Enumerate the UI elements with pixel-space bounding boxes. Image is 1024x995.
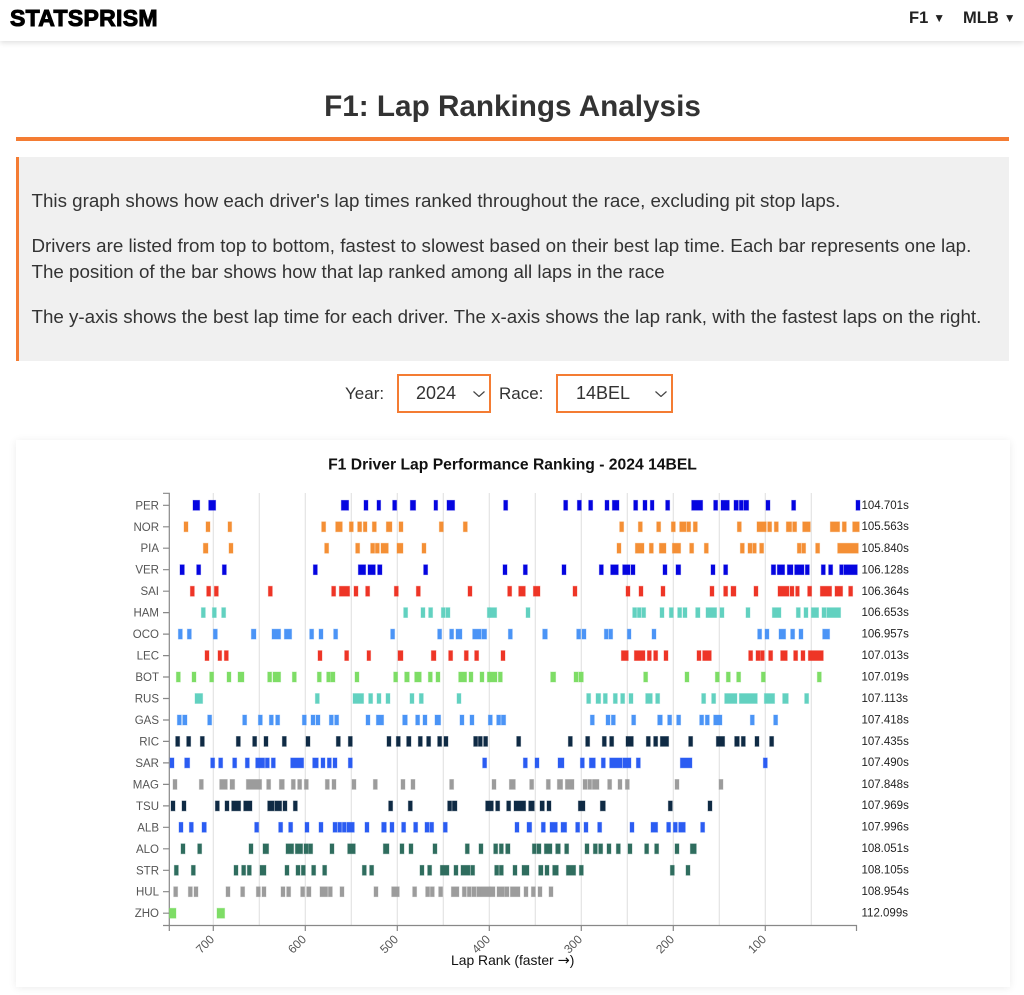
best lap time labels: 112.099s [862,907,908,919]
x tick labels: 100 [745,932,769,956]
driver labels [133,500,160,920]
panel: chart card [16,440,1010,987]
driver labels: BOT [135,672,159,684]
best lap time labels: 107.848s [862,779,909,791]
driver labels: RUS [135,694,159,706]
driver labels: ALO [136,844,159,856]
best lap time labels: 107.019s [862,672,909,684]
best lap time labels: 107.113s [862,693,908,705]
driver labels: PIA [140,543,159,555]
driver labels: NOR [133,522,159,534]
bars: GAS [177,715,778,725]
best lap time labels: 108.105s [862,864,909,876]
best lap time labels: 105.840s [862,543,909,555]
best lap time labels: 107.490s [862,757,909,769]
title: F1: Lap Rankings Analysis [324,90,701,123]
driver labels: OCO [133,629,159,641]
logo: STATSPRISM [10,5,158,31]
bars: STR [174,865,690,875]
bars: SAR [170,758,767,768]
driver labels: MAG [133,779,159,791]
x tick labels [193,932,769,956]
driver labels: LEC [137,651,159,663]
x tick labels: 700 [193,932,217,956]
text: how to read bars: The position of the bar shows how that lap ranked among all laps in the race [32,261,665,282]
text: graph summary: This graph shows how each driver's lap times ranked throughout the race, excluding pit stop laps. [32,190,840,211]
bars: HUL [174,887,553,897]
select: year [397,374,491,413]
driver labels: HAM [133,608,159,620]
header bar [0,0,1024,41]
driver labels: HUL [136,887,160,899]
driver labels: STR [136,865,159,877]
x axis [169,925,857,931]
best lap time labels: 104.701s [862,500,909,512]
best lap time labels: 105.563s [862,521,909,533]
best lap time labels [862,500,909,919]
bars: TSU [171,801,712,811]
bars: PIA [203,543,858,553]
bars: ALO [181,844,696,854]
best lap time labels: 107.969s [862,800,909,812]
best lap time labels: 106.957s [862,629,909,641]
driver labels: SAI [140,586,159,598]
text: how to read bars: Drivers are listed from top to bottom, fastest to slowest based on their best lap time. Each bar represents one lap. [32,235,971,256]
best lap time labels: 107.013s [862,650,909,662]
best lap time labels: 106.653s [862,607,909,619]
select: year: 2024 [416,383,456,403]
bars: ALB [179,822,705,832]
driver labels: RIC [139,736,159,748]
bars: HAM [201,608,841,618]
chart title: F1 Driver Lap Performance Ranking - 2024 14BEL [328,456,697,474]
bars: LEC [205,651,823,661]
x tick labels: 400 [469,932,493,956]
x tick labels: 200 [653,932,677,956]
panel: description [16,157,1009,361]
driver labels: GAS [135,715,159,727]
bars: ZHO [169,908,225,918]
best lap time labels: 107.418s [862,714,909,726]
bars: RIC [176,736,774,746]
driver labels: PER [135,500,159,512]
best lap time labels: 108.051s [862,843,909,855]
bars: VER [180,565,857,575]
bars: MAG [173,779,723,789]
x tick labels: 300 [561,932,585,956]
bars: RUS [195,694,809,704]
bars: BOT [176,672,821,682]
driver labels: ZHO [135,908,159,920]
label: year: Year: [345,384,384,403]
x axis title: Lap Rank (faster →) [451,952,574,969]
driver labels: ALB [137,822,159,834]
bars: NOR [184,522,859,532]
x tick labels: 600 [285,932,309,956]
title underline [16,137,1009,140]
driver labels: SAR [135,758,159,770]
select: race: 14BEL [576,383,630,403]
text: how to read bars [32,235,971,282]
bars: PER [193,500,860,510]
best lap time labels: 106.364s [862,586,909,598]
y axis [163,493,169,926]
best lap time labels: 108.954s [862,886,909,898]
x tick labels: 500 [377,932,401,956]
label: race: Race: [499,384,543,403]
text: axes explanation: The y-axis shows the best lap time for each driver. The x-axis shows the lap rank, with the fastest laps on the right. [32,306,981,327]
nav: MLB menu: MLB ▼ [963,9,1016,27]
best lap time labels: 106.128s [862,564,909,576]
best lap time labels: 107.996s [862,822,909,834]
bars: SAI [190,586,853,596]
select: race [556,374,673,413]
driver labels: TSU [136,801,159,813]
nav: F1 menu: F1 ▼ [909,9,945,27]
best lap time labels: 107.435s [862,736,909,748]
driver labels: VER [135,565,159,577]
bars: OCO [178,629,830,639]
